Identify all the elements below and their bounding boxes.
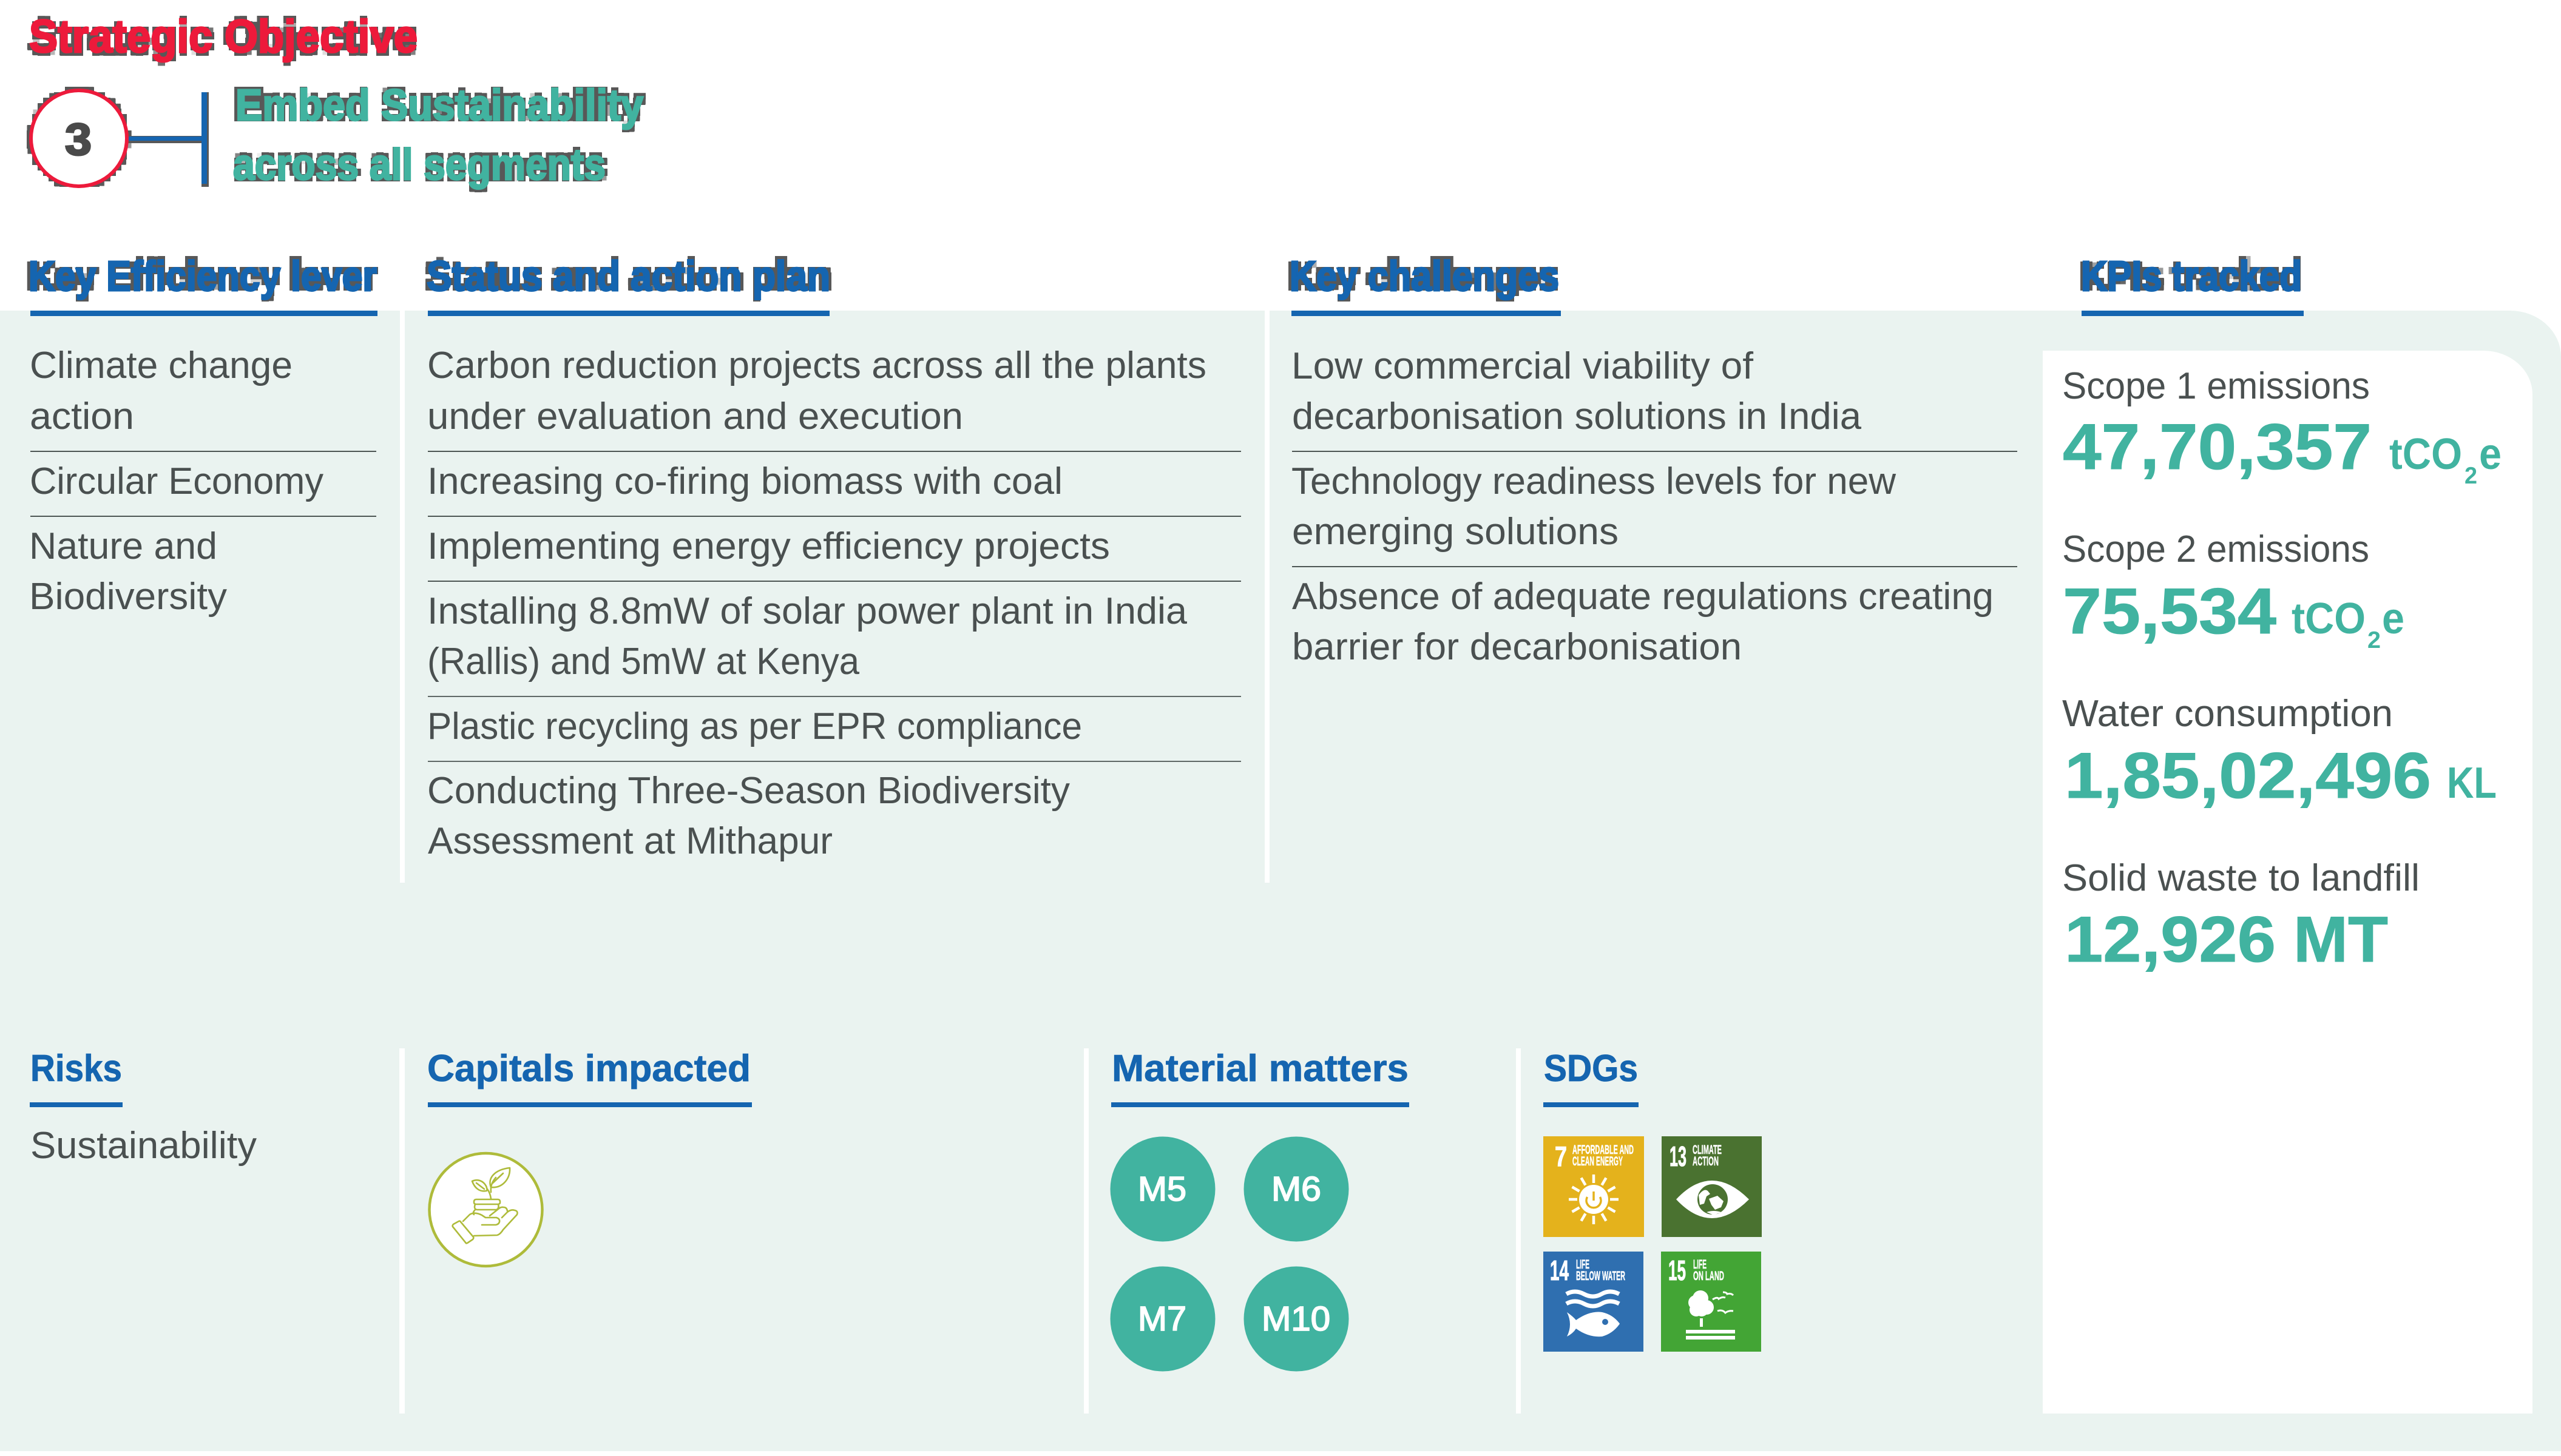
KPI: scope 2 emissions: 75,534 [2063, 575, 2276, 647]
list: efficiency levers: Biodiversity [29, 576, 227, 618]
heading: Key challenges: Key challenges [1290, 252, 1559, 300]
section: SDGs [1543, 1048, 1762, 1352]
KPI: scope 2 emissions [2062, 528, 2404, 653]
list: efficiency levers [29, 345, 376, 618]
KPI: water consumption: 1,85,02,496 [2065, 739, 2431, 812]
list: challenges: emerging solutions [1292, 511, 1619, 553]
heading: Material matters: Material matters [1112, 1048, 1409, 1090]
SDG 14 tile [1543, 1252, 1643, 1352]
list: action plan items: Installing 8.8mW of solar power plant in India [427, 590, 1188, 632]
SDG 15 tile [1661, 1252, 1761, 1352]
section: risks [30, 1048, 257, 1167]
list: action plan items [427, 345, 1241, 862]
badge: M5 [1111, 1137, 1215, 1241]
SDG 13 tile: 13 [1670, 1141, 1686, 1172]
heading: Key Efficiency lever: Key Efficiency lever [29, 252, 377, 300]
panel: white KPI card [2043, 351, 2532, 1414]
badge: M6: M6 [1271, 1170, 1321, 1208]
SDG 15 tile: LIFE [1693, 1258, 1707, 1272]
column 4: KPIs tracked [2062, 252, 2502, 976]
SDG 14 tile: LIFE [1576, 1258, 1589, 1272]
objective heading: across all segments [233, 141, 606, 189]
column 1: key efficiency lever [29, 252, 377, 618]
KPI: scope 1 emissions: e [2479, 430, 2502, 479]
list: efficiency levers: Climate change [30, 345, 293, 386]
list: efficiency levers: Circular Economy [30, 460, 323, 502]
SDG 15 tile: 15 [1668, 1255, 1686, 1286]
KPI: scope 1 emissions: tCO [2389, 430, 2462, 479]
KPI: scope 2 emissions: e [2382, 595, 2404, 643]
SDG 13 tile: ACTION [1693, 1154, 1719, 1168]
list: challenges: Absence of adequate regulations creating [1292, 576, 1994, 618]
objective badge with connector [31, 90, 207, 186]
badge: M7 [1111, 1267, 1215, 1371]
SDG 14 tile: 14 [1550, 1255, 1569, 1286]
KPI: scope 1 emissions [2062, 365, 2502, 489]
KPI: solid waste to landfill: 12,926 [2065, 903, 2276, 976]
KPI: scope 2 emissions: Scope 2 emissions [2062, 528, 2369, 570]
section: material matters [1111, 1048, 1409, 1371]
heading: Status and action plan: Status and action plan [427, 252, 830, 300]
SDG 7 tile [1543, 1136, 1644, 1237]
SDG 7 tile: 7 [1555, 1141, 1567, 1172]
heading: KPIs tracked: KPIs tracked [2081, 252, 2302, 300]
SDG 14 tile: BELOW WATER [1576, 1269, 1625, 1283]
heading: Capitals impacted: Capitals impacted [427, 1048, 751, 1090]
SDG 13 tile: CLIMATE [1693, 1143, 1722, 1157]
KPI: scope 2 emissions: tCO [2292, 595, 2366, 643]
column 3: key challenges [1290, 252, 2017, 668]
list: action plan items: Carbon reduction projects across all the plants [427, 345, 1206, 386]
list: action plan items: (Rallis) and 5mW at Kenya [427, 641, 859, 682]
SDG 7 tile: CLEAN ENERGY [1572, 1154, 1623, 1168]
list: efficiency levers: action [30, 396, 134, 437]
badge: M10 [1244, 1267, 1348, 1371]
objective heading [233, 81, 643, 189]
KPI: scope 1 emissions: 47,70,357 [2063, 410, 2372, 483]
objective heading: Embed Sustainability [235, 81, 643, 130]
title: Strategic Objective: Strategic Objective [29, 11, 418, 62]
list: challenges [1291, 345, 2017, 668]
column 2: status and action plan [427, 252, 1241, 862]
list: challenges: Technology readiness levels for new [1291, 460, 1896, 502]
panel: pale green background [0, 311, 2561, 1451]
badge: M7: M7 [1138, 1299, 1186, 1338]
SDG 13 tile [1662, 1136, 1762, 1237]
SDG 7 tile: AFFORDABLE AND [1572, 1143, 1634, 1157]
KPI: solid waste to landfill: Solid waste to landfill [2062, 857, 2420, 899]
heading: Risks: Risks [30, 1048, 122, 1090]
KPI: scope 1 emissions: 2 [2465, 463, 2477, 489]
text: Sustainability: Sustainability [30, 1125, 257, 1167]
KPI: scope 1 emissions: Scope 1 emissions [2062, 365, 2370, 407]
list: action plan items: Increasing co-firing biomass with coal [427, 460, 1063, 502]
list: action plan items: under evaluation and execution [427, 396, 963, 437]
KPI: water consumption: KL [2447, 759, 2497, 807]
objective badge with connector: 3 [65, 114, 92, 164]
list: efficiency levers: Nature and [29, 525, 217, 567]
KPI: water consumption [2062, 693, 2497, 812]
list: challenges: barrier for decarbonisation [1292, 626, 1742, 668]
list: action plan items: Plastic recycling as per EPR compliance [427, 706, 1082, 747]
heading: SDGs: SDGs [1544, 1048, 1638, 1090]
KPI: solid waste to landfill: MT [2293, 903, 2388, 976]
column dividers [399, 311, 1521, 1414]
SDG 15 tile: ON LAND [1693, 1269, 1724, 1283]
icon: natural capital plant in hand [430, 1153, 543, 1266]
badge: M10: M10 [1262, 1299, 1330, 1338]
badge: M6 [1244, 1137, 1348, 1241]
list: action plan items: Implementing energy efficiency projects [427, 525, 1110, 567]
list: action plan items: Conducting Three-Season Biodiversity [427, 770, 1070, 812]
KPI: solid waste to landfill [2062, 857, 2420, 976]
list: challenges: decarbonisation solutions in India [1292, 396, 1862, 437]
KPI: scope 2 emissions: 2 [2367, 627, 2381, 653]
list: action plan items: Assessment at Mithapur [428, 820, 833, 862]
KPI: water consumption: Water consumption [2062, 693, 2393, 735]
list: challenges: Low commercial viability of [1291, 345, 1754, 387]
badge: M5: M5 [1138, 1170, 1186, 1208]
section: capitals impacted [427, 1048, 752, 1266]
